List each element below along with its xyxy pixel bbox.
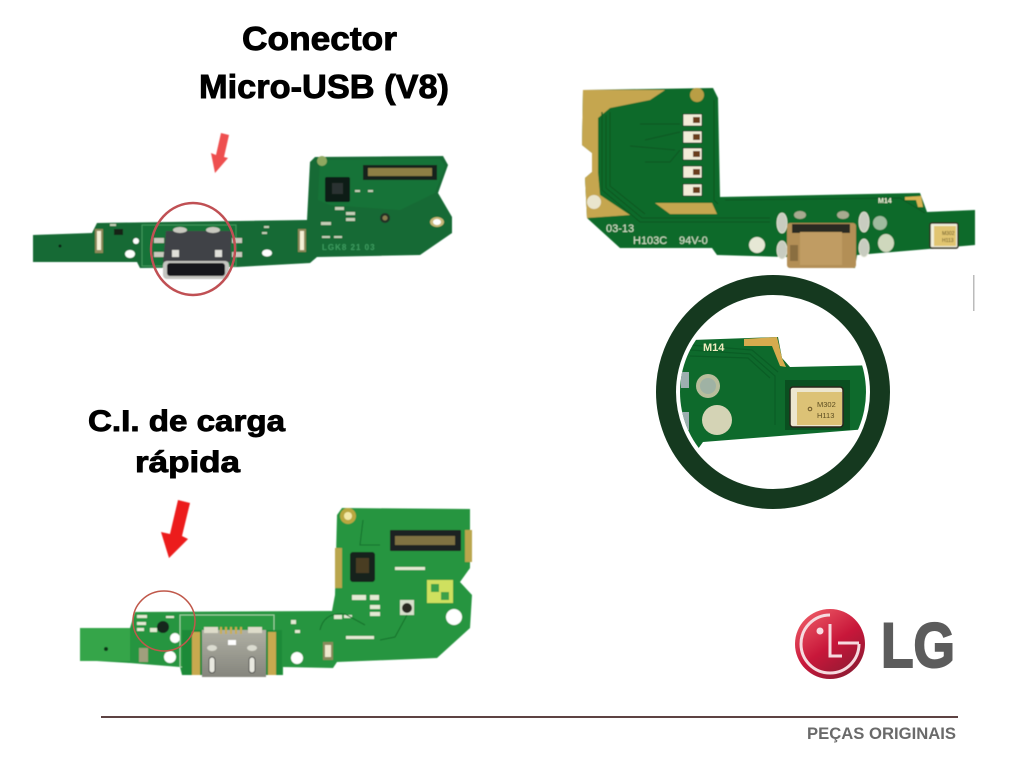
- title: Conector Micro-USB (V8): [199, 20, 449, 105]
- title: C.I. de carga rápida: [88, 405, 285, 479]
- board: charging board back, top right: H113: [942, 238, 954, 244]
- brand logo: LG: [795, 609, 955, 681]
- arrow: points to micro-USB connector: [211, 133, 229, 173]
- magnified view: microphone detail inside dark green ring: M14: [703, 342, 725, 354]
- arrow: points to fast-charge IC: [161, 500, 190, 558]
- footer label: PEÇAS ORIGINAIS: PEÇAS ORIGINAIS: [807, 724, 956, 743]
- board: charging board back, top right: H103C: [633, 235, 667, 247]
- callout circle: micro-USB connector: [151, 203, 235, 295]
- magnified view: microphone detail inside dark green ring: H113: [817, 411, 834, 420]
- title: Conector Micro-USB (V8): Conector: [242, 20, 397, 57]
- board: charging board front, bottom left: [80, 508, 472, 677]
- footer rule: [101, 716, 958, 718]
- board: charging board front, top left: LGK8 21 03: [322, 243, 376, 252]
- magnified view: microphone detail inside dark green ring: [666, 285, 880, 499]
- brand logo: LG: LG: [881, 611, 955, 681]
- board: charging board back, top right: [582, 88, 975, 268]
- title: C.I. de carga rápida: C.I. de carga: [88, 405, 285, 438]
- board: charging board back, top right: M302: [942, 231, 955, 237]
- title: Conector Micro-USB (V8): Micro-USB (V8): [199, 68, 449, 105]
- magnified view: microphone detail inside dark green ring: M302: [817, 400, 836, 409]
- callout circle: fast-charge IC: [133, 591, 195, 651]
- board: charging board back, top right: 94V-0: [679, 235, 708, 247]
- title: C.I. de carga rápida: rápida: [135, 446, 240, 479]
- board: charging board back, top right: M14: [878, 198, 892, 205]
- board: charging board front, top left: [33, 156, 452, 279]
- board: charging board back, top right: 03-13: [606, 223, 634, 235]
